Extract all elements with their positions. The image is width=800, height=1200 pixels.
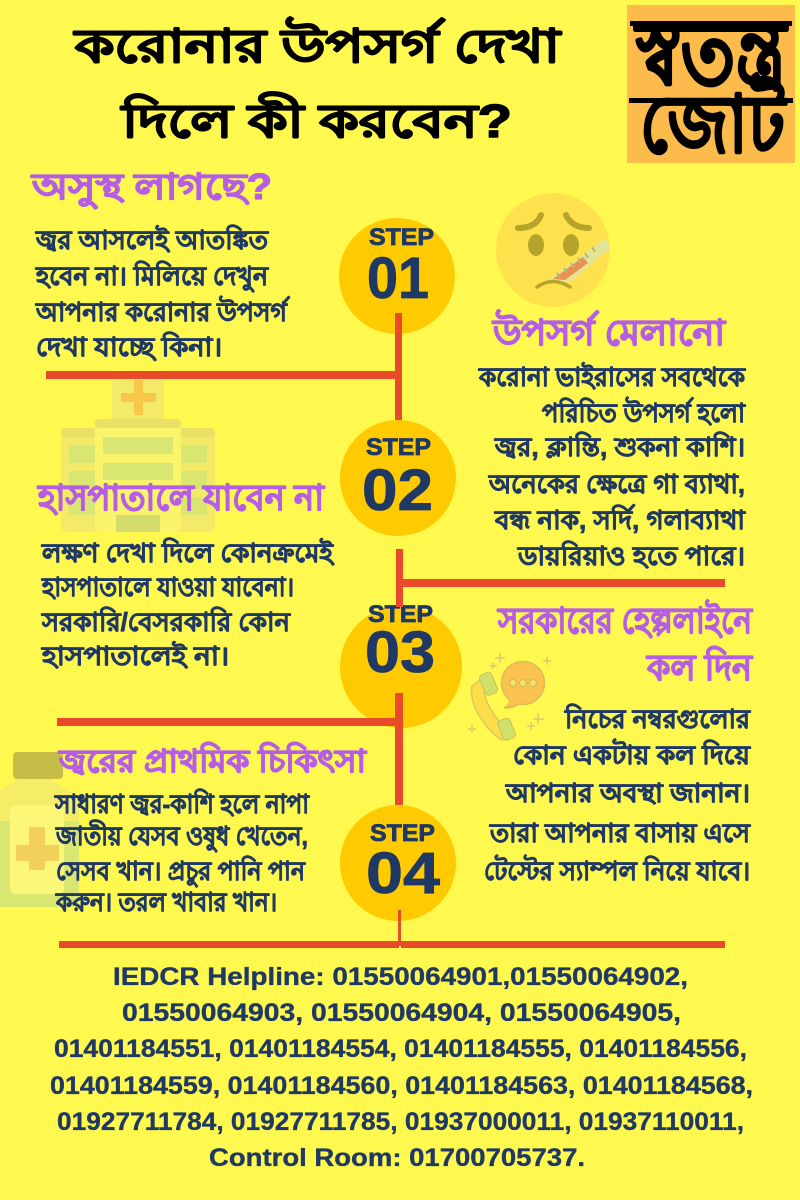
- panel: do not go to hospital: হাসপাতালেই না।: [41, 640, 229, 671]
- helpline numbers: 01401184559, 01401184560, 01401184563, 01401184568,: [50, 1072, 753, 1100]
- panel: call government helpline: সরকারের হেল্পলাইনে: [496, 599, 753, 641]
- panel: feeling unwell: [30, 166, 291, 362]
- panel: feeling unwell: দেখা যাচ্ছে কিনা।: [36, 331, 222, 362]
- panel: call government helpline: টেস্টের স্যাম্পল নিয়ে যাবে।: [484, 854, 750, 886]
- step 4 badge: [340, 805, 456, 921]
- panel: call government helpline: [484, 599, 753, 886]
- step 2 badge: 02: [362, 458, 433, 523]
- panel: do not go to hospital: হাসপাতালে যাওয়া যাবেনা।: [41, 572, 294, 602]
- panel: match symptoms: ডায়রিয়াও হতে পারে।: [517, 540, 745, 571]
- step 1 badge: STEP: [369, 224, 434, 251]
- title: দিলে কী করবেন?: [120, 91, 512, 147]
- panel: call government helpline: তারা আপনার বাসায় এসে: [489, 818, 751, 848]
- panel: match symptoms: বন্ধ নাক, সর্দি, গলাব্যাথা: [494, 504, 746, 535]
- title: [73, 16, 562, 147]
- panel: primary fever treatment: সেসব খান। প্রচুর পানি পান: [56, 855, 306, 888]
- panel: match symptoms: উপসর্গ মেলানো: [491, 309, 727, 353]
- panel: match symptoms: [478, 309, 746, 571]
- helpline numbers: 01927711784, 01927711785, 01937000011, 01937110011,: [57, 1108, 744, 1136]
- helpline numbers: [50, 963, 753, 1172]
- step 1 badge: [339, 218, 455, 334]
- panel: primary fever treatment: জাতীয় যেসব ওষুধ খেতেন,: [55, 819, 308, 853]
- helpline numbers: 01550064903, 01550064904, 01550064905,: [122, 999, 681, 1027]
- panel: feeling unwell: আপনার করোনার উপসর্গ: [35, 295, 291, 327]
- step 4 badge: 04: [366, 841, 440, 906]
- panel: call government helpline: কোন একটায় কল দিয়ে: [513, 738, 752, 770]
- icon: sick face with thermometer: [496, 193, 610, 307]
- panel: primary fever treatment: জ্বরের প্রাথমিক চিকিৎসা: [58, 741, 368, 779]
- helpline numbers: Control Room: 01700705737.: [209, 1144, 585, 1172]
- connector lines: [46, 313, 725, 948]
- panel: feeling unwell: অসুস্থ লাগছে?: [30, 166, 272, 210]
- step 3 badge: [340, 601, 462, 728]
- step 3 badge: 03: [365, 620, 435, 685]
- icon: medicine bottle watermark: [0, 752, 79, 907]
- title: করোনার উপসর্গ দেখা: [73, 16, 562, 72]
- icon: hospital watermark: [61, 376, 215, 532]
- step 3 badge: STEP: [368, 601, 433, 628]
- panel: match symptoms: পরিচিত উপসর্গ হলো: [542, 396, 746, 428]
- panel: primary fever treatment: সাধারণ জ্বর-কাশি হলে নাপা: [54, 788, 310, 819]
- panel: match symptoms: অনেকের ক্ষেত্রে গা ব্যাথা,: [488, 469, 745, 499]
- panel: do not go to hospital: সরকারি/বেসরকারি কোন: [41, 606, 291, 637]
- panel: feeling unwell: হবেন না। মিলিয়ে দেখুন: [35, 260, 269, 293]
- panel: call government helpline: আপনার অবস্থা জানান।: [505, 778, 750, 808]
- panel: feeling unwell: জ্বর আসলেই আতঙ্কিত: [35, 224, 269, 255]
- panel: do not go to hospital: লক্ষণ দেখা দিলে কোনক্রমেই: [41, 537, 335, 568]
- panel: match symptoms: জ্বর, ক্লান্তি, শুকনা কাশি।: [494, 431, 745, 462]
- panel: call government helpline: নিচের নম্বরগুলোর: [564, 703, 752, 734]
- step 1 badge: 01: [367, 246, 429, 311]
- panel: do not go to hospital: হাসপাতালে যাবেন না: [36, 477, 325, 518]
- logo: [627, 4, 795, 169]
- panel: primary fever treatment: [54, 741, 368, 917]
- helpline numbers: IEDCR Helpline: 01550064901,01550064902,: [113, 963, 688, 991]
- helpline numbers: 01401184551, 01401184554, 01401184555, 01401184556,: [54, 1035, 747, 1063]
- step 2 badge: STEP: [366, 434, 431, 461]
- icon: phone with speech bubble: [468, 653, 551, 741]
- step 4 badge: STEP: [370, 820, 435, 847]
- panel: primary fever treatment: করুন। তরল খাবার খান।: [55, 887, 277, 917]
- panel: do not go to hospital: [36, 477, 335, 671]
- step 2 badge: [340, 420, 456, 536]
- panel: match symptoms: করোনা ভাইরাসের সবথেকে: [478, 361, 746, 392]
- panel: call government helpline: কল দিন: [645, 646, 753, 688]
